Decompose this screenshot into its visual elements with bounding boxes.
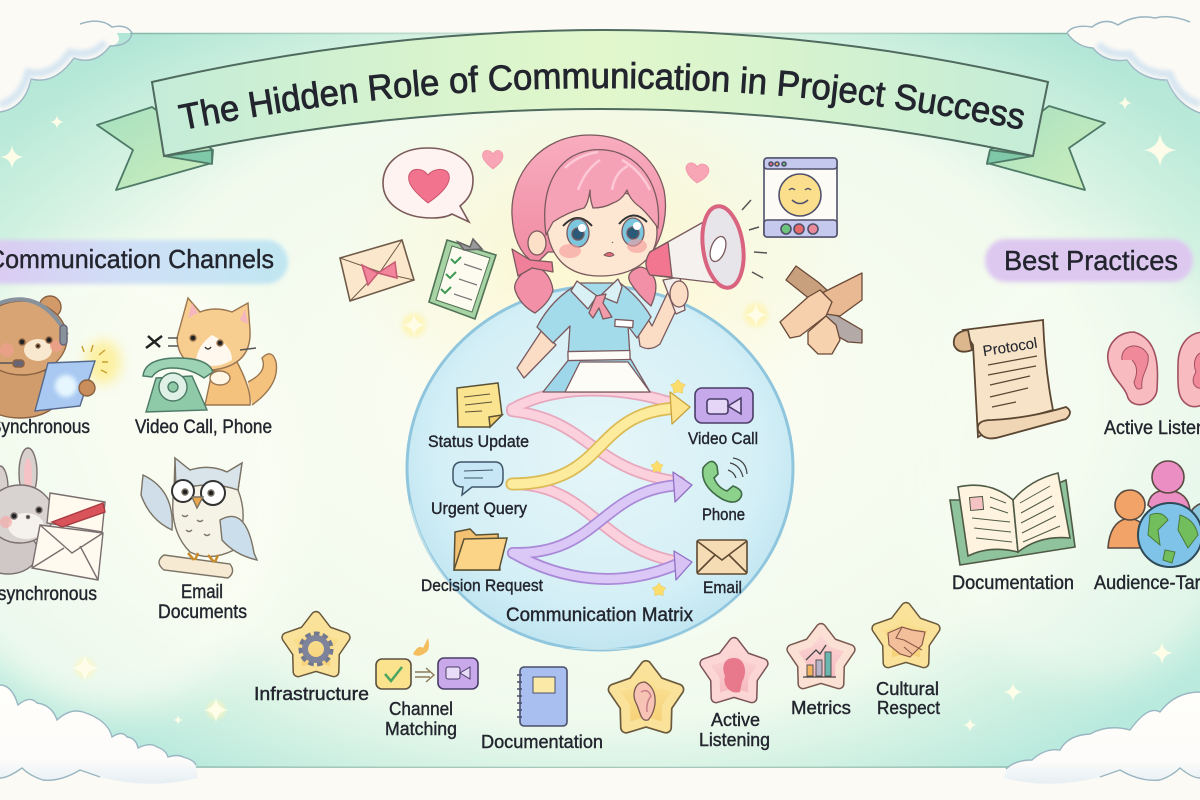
light hand [780, 290, 832, 338]
arrow heads [670, 392, 692, 580]
girl with megaphone [512, 135, 749, 392]
ribbon bow [512, 249, 553, 276]
tan hand [818, 273, 862, 316]
brown arm [786, 266, 838, 312]
icon: gear [302, 635, 330, 663]
star: ear [614, 666, 678, 727]
label [158, 582, 247, 623]
label: Documentation [481, 731, 603, 752]
label: Matching [385, 718, 457, 739]
title [182, 88, 1024, 130]
label: Metrics [791, 697, 851, 718]
left icons [453, 383, 507, 570]
star: active listening [699, 642, 770, 750]
megaphone bell [697, 204, 749, 290]
title banner: The Hidden Role of Communication in Project Success [178, 62, 1024, 129]
label: Listening [699, 729, 770, 750]
envelope with bow [340, 240, 414, 301]
protocol label: Protocol [982, 335, 1039, 360]
matrix labels: Status Update [428, 432, 529, 451]
matrix labels [421, 429, 758, 626]
video window with smiley [764, 158, 837, 237]
hair back [512, 135, 666, 264]
megaphone handle [663, 277, 685, 314]
bear: synchronous [0, 296, 121, 418]
grey sleeve hand [822, 312, 862, 343]
label: Documentation [952, 573, 1074, 594]
hand [670, 281, 688, 307]
scroll: protocol [954, 320, 1070, 438]
eyes [563, 215, 647, 226]
megaphone sound lines [742, 200, 767, 278]
matrix labels: Urgent Query [431, 499, 527, 518]
open book [950, 473, 1075, 565]
owl: email documents [141, 458, 257, 578]
skirt and apron [543, 358, 650, 392]
bangs [545, 150, 659, 235]
arrow ribbons [512, 390, 680, 579]
star: infrastructure [254, 616, 369, 704]
channel matching [376, 638, 478, 739]
people and globe [1108, 461, 1200, 567]
arms [517, 330, 556, 378]
small stars [651, 379, 685, 596]
star: cultural respect [876, 607, 940, 718]
cloud: top left [0, 0, 140, 112]
left pigtail [515, 265, 553, 313]
nose and mouth [604, 242, 614, 256]
label: Channel [389, 698, 453, 719]
megaphone band [646, 242, 672, 277]
ear [528, 231, 546, 255]
banner ribbon [152, 30, 1048, 156]
face [546, 190, 657, 276]
title banner [96, 29, 1106, 191]
matrix labels: Email [703, 578, 742, 597]
communication matrix sphere [407, 286, 793, 650]
notebook: documentation [481, 667, 603, 752]
matrix labels: Decision Request [421, 576, 543, 595]
matrix labels: Communication Matrix [506, 605, 693, 626]
label: Respect [877, 697, 940, 718]
megaphone cone [650, 220, 717, 283]
heading: best practices: Best Practices [1004, 245, 1178, 276]
heading: communication channels [0, 240, 288, 284]
clipboard checklist [429, 239, 496, 319]
label: Video Call, Phone [135, 417, 272, 438]
right pigtail [629, 267, 656, 306]
banner tails [97, 106, 1105, 190]
bunny: asynchronous [0, 448, 105, 580]
label [699, 709, 770, 750]
label: Active [711, 709, 760, 730]
speech bubble with heart [383, 148, 473, 222]
cloud: top right [1060, 0, 1200, 113]
right icons [695, 388, 753, 574]
stacked hands [780, 266, 862, 354]
lower hand [808, 316, 840, 354]
cheeks [559, 244, 581, 258]
shirt [537, 283, 651, 356]
label [876, 678, 940, 718]
cloud: bottom left [0, 685, 198, 784]
matrix labels: Phone [702, 505, 745, 524]
label: Email [181, 582, 223, 603]
label: Documents [158, 602, 247, 623]
matrix labels: Video Call [688, 429, 758, 448]
sparkles [0, 96, 1177, 732]
ears [1108, 332, 1200, 407]
label: Infrastructure [254, 683, 369, 704]
star: metrics [791, 628, 851, 718]
cat: video call, phone [143, 298, 276, 412]
label: Cultural [876, 678, 939, 699]
hearts [482, 150, 709, 183]
label [385, 698, 457, 739]
cloud: bottom right [1004, 692, 1200, 784]
heading: best practices [985, 239, 1193, 282]
